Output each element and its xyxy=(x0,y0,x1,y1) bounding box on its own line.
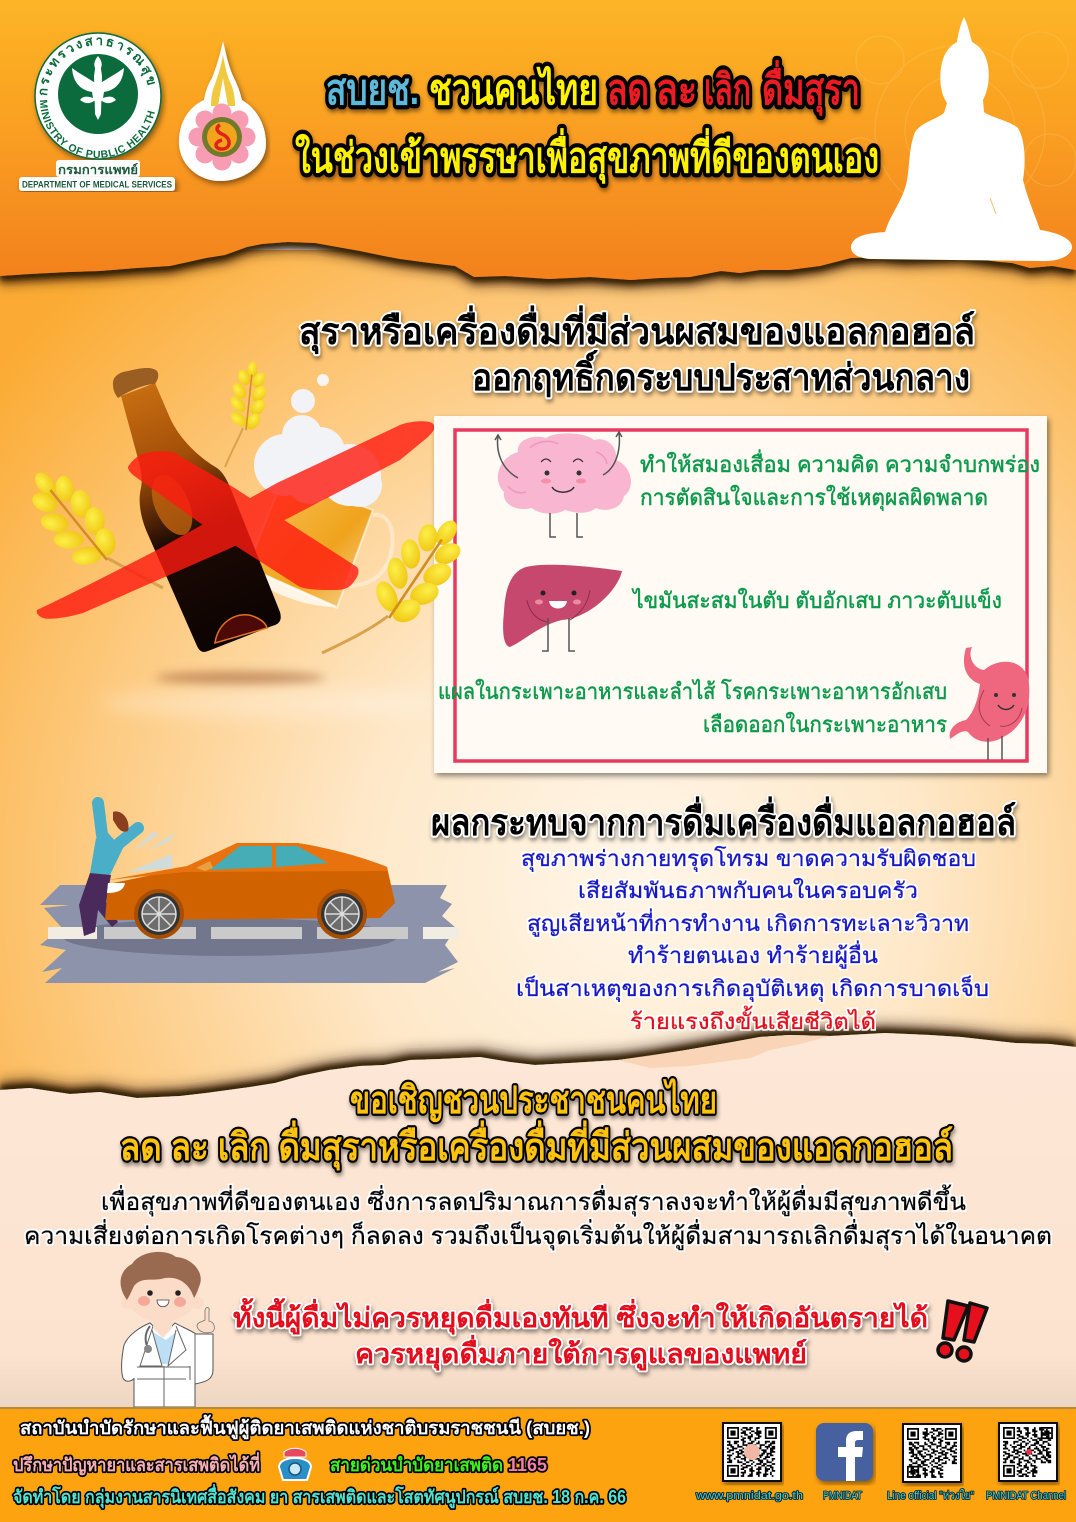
footer: hotline: สายด่วนบำบัดยาเสพติด xyxy=(330,1455,503,1475)
wheat ear: right, overlapping panel xyxy=(322,501,481,653)
floor shadow xyxy=(155,672,325,684)
label: department English: DEPARTMENT OF MEDICAL SERVICES xyxy=(22,180,172,190)
panel: health effects xyxy=(434,416,1047,773)
QR labels: Line official "ห่วงใย" xyxy=(887,1489,974,1502)
beer mug xyxy=(247,374,393,608)
pedestrian xyxy=(79,803,138,936)
beer bottle xyxy=(113,368,281,652)
icon: telephone xyxy=(279,1448,311,1480)
text: liver effects: ไขมันสะสมในตับ ตับอักเสบ ภาวะตับแข็ง xyxy=(631,586,1002,613)
text: brain effects: ทำให้สมองเสื่อม ความคิด ความจำบกพร่อง xyxy=(640,449,1040,477)
QR code: Line official xyxy=(903,1424,961,1482)
body text xyxy=(24,1184,1052,1251)
wheel: front xyxy=(138,893,180,935)
text: stomach effects xyxy=(438,679,947,737)
warning text xyxy=(233,1297,928,1371)
list: social impacts: ทำร้ายตนเอง ทำร้ายผู้อื่น xyxy=(628,940,878,969)
title line 1: สบยช. xyxy=(326,66,419,113)
red cross xyxy=(37,421,435,619)
QR code: website xyxy=(723,1423,781,1481)
wheat ear: left xyxy=(11,454,163,588)
car xyxy=(105,843,395,939)
label: department Thai: กรมการแพทย์ xyxy=(58,163,138,177)
heading: alcohol affects central nervous system: สุราหรือเครื่องดื่มที่มีส่วนผสมของแอลกอฮอล์ xyxy=(299,305,975,355)
lower section with torn edge xyxy=(0,1033,1076,1408)
body text: ความเสี่ยงต่อการเกิดโรคต่างๆ ก็ลดลง รวมถึงเป็นจุดเริ่มต้นให้ผู้ดื่มสามารถเลิกดื่มสุราได้ในอนาคต xyxy=(24,1219,1052,1251)
title line 1: ลด xyxy=(607,66,649,113)
list: social impacts xyxy=(516,846,989,1002)
QR labels: PMNIDAT xyxy=(823,1490,862,1502)
logo: Ministry of Public Health xyxy=(17,32,181,192)
title line 1: ละ xyxy=(656,66,697,113)
icon: Facebook xyxy=(816,1423,873,1481)
heading: alcohol affects central nervous system: ออกฤทธิ์กดระบบประสาทส่วนกลาง xyxy=(472,350,970,398)
text: brain effects: การตัดสินใจและการใช้เหตุผลผิดพลาด xyxy=(640,485,988,511)
icon: stomach character xyxy=(950,647,1029,760)
heading: impacts of drinking: ผลกระทบจากการดื่มเครื่องดื่มแอลกอฮอล์ xyxy=(431,796,1016,843)
doctor character xyxy=(121,1252,214,1407)
wheel: rear xyxy=(321,893,363,935)
logo: Ministry of Public Health: กระทรวงสาธารณสุข xyxy=(40,37,156,96)
footer xyxy=(0,1407,1076,1522)
list: social impacts: สุขภาพร่างกายทรุดโทรม ขาดความรับผิดชอบ xyxy=(521,846,976,872)
QR labels: www.pmnidat.go.th xyxy=(695,1490,803,1502)
footer: institute name: สถาบันบำบัดรักษาและฟื้นฟูผู้ติดยาเสพติดแห่งชาติบรมราชชนนี (สบยช.) xyxy=(20,1414,590,1440)
QR code: channel xyxy=(999,1423,1057,1481)
emblem: caduceus xyxy=(72,56,124,120)
torn paper strip xyxy=(618,1035,830,1068)
footer: consultation text: ปรึกษาปัญหายาและสารเสพติดได้ที่ xyxy=(13,1452,260,1476)
list: social impacts: เป็นสาเหตุของการเกิดอุบัติเหตุ เกิดการบาดเจ็บ xyxy=(516,974,989,1002)
title line 1: ชวนคนไทย xyxy=(429,65,598,113)
call to action heading xyxy=(120,1078,953,1171)
Buddha silhouette xyxy=(851,17,1072,261)
title line 1: เลิก xyxy=(704,66,751,113)
footer: hotline: 1165 xyxy=(508,1455,547,1475)
road xyxy=(40,885,458,983)
text: brain effects xyxy=(640,449,1040,511)
illustration: car hitting a pedestrian xyxy=(40,803,459,983)
warning text: ทั้งนี้ผู้ดื่มไม่ควรหยุดดื่มเองทันที ซึ่งจะทำให้เกิดอันตรายได้ xyxy=(233,1297,928,1335)
title line 2: ในช่วงเข้าพรรษาเพื่อสุขภาพที่ดีของตนเอง xyxy=(295,128,879,184)
logo: Thanyarak institute emblem xyxy=(179,41,266,181)
list: social impacts: สูญเสียหน้าที่การทำงาน เกิดการทะเลาะวิวาท xyxy=(527,908,969,937)
bubbles xyxy=(291,389,315,413)
call to action heading: ขอเชิญชวนประชาชนคนไทย xyxy=(350,1078,717,1122)
title xyxy=(295,60,879,184)
icon: brain character xyxy=(495,432,631,537)
icon: exclamation marks xyxy=(938,1301,987,1361)
emblem: lotus xyxy=(188,104,256,170)
heading: alcohol affects central nervous system xyxy=(299,305,975,398)
text: stomach effects: เลือดออกในกระเพาะอาหาร xyxy=(703,712,947,737)
wheat ear: top xyxy=(225,359,272,467)
middle section background xyxy=(0,250,1076,1100)
mandala pattern behind Buddha xyxy=(838,32,1076,215)
warning text: ควรหยุดดื่มภายใต้การดูแลของแพทย์ xyxy=(355,1334,807,1371)
body text: เพื่อสุขภาพที่ดีของตนเอง ซึ่งการลดปริมาณการดื่มสุราลงจะทำให้ผู้ดื่มมีสุขภาพดีขึ้น xyxy=(101,1184,966,1217)
QR labels xyxy=(695,1489,1066,1502)
top orange banner with torn edge xyxy=(0,0,1076,280)
list: social impacts: เสียสัมพันธภาพกับคนในครอบครัว xyxy=(578,878,918,903)
footer: credit: จัดทำโดย กลุ่มงานสารนิเทศสื่อสังคม ยา สารเสพติดและโสตทัศนูปกรณ์ สบยช. 18 ก.ค. 66 xyxy=(13,1484,626,1509)
title line 1 xyxy=(326,60,860,116)
title line 1: ดื่มสุรา xyxy=(762,60,860,116)
icon: liver character xyxy=(503,565,622,651)
beer foam xyxy=(254,415,382,507)
call to action heading: ลด ละ เลิก ดื่มสุราหรือเครื่องดื่มที่มีส่วนผสมของแอลกอฮอล์ xyxy=(120,1120,953,1171)
illustration: bottle and beer mug crossed out xyxy=(11,359,440,718)
list item: fatal injury warning: ร้ายแรงถึงขั้นเสียชีวิตได้ xyxy=(630,1006,876,1034)
impact lines xyxy=(128,832,176,872)
logo: Ministry of Public Health: MINISTRY OF PUBLIC HEALTH xyxy=(40,100,155,158)
label: department English xyxy=(19,177,175,191)
road dashes xyxy=(48,927,459,939)
QR labels: PMNIDAT Channel xyxy=(986,1490,1066,1502)
text: stomach effects: แผลในกระเพาะอาหารและลำไส้ โรคกระเพาะอาหารอักเสบ xyxy=(438,679,947,704)
